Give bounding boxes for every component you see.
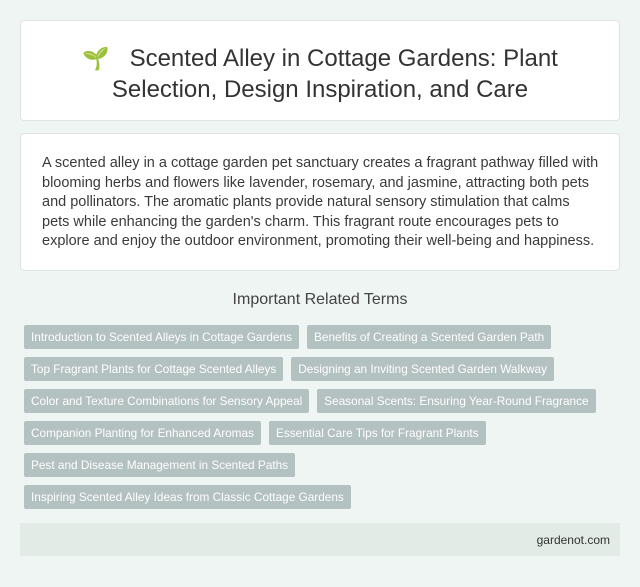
section heading: Important Related Terms: [233, 291, 407, 308]
tag: [291, 357, 554, 381]
title: Selection, Design Inspiration, and Care: [112, 76, 528, 103]
description card: [20, 133, 620, 271]
tag: Pest and Disease Management in Scented Paths: [31, 458, 288, 472]
header card: [20, 20, 620, 121]
tag: Companion Planting for Enhanced Aromas: [31, 426, 254, 440]
tag: [24, 485, 351, 509]
title: [82, 45, 558, 103]
tag: Essential Care Tips for Fragrant Plants: [276, 426, 479, 440]
tag: [24, 453, 295, 477]
tag: [317, 389, 596, 413]
tag: [269, 421, 486, 445]
tag: [24, 389, 309, 413]
tag: [24, 325, 299, 349]
tag: Seasonal Scents: Ensuring Year-Round Fragrance: [324, 394, 589, 408]
footer: [20, 523, 620, 556]
footer: gardenot.com: [537, 533, 610, 547]
tag: [24, 421, 261, 445]
tag: Introduction to Scented Alleys in Cottage Gardens: [31, 330, 292, 344]
tag: Benefits of Creating a Scented Garden Path: [314, 330, 544, 344]
tag: Top Fragrant Plants for Cottage Scented Alleys: [31, 362, 276, 376]
description text: A scented alley in a cottage garden pet sanctuary creates a fragrant pathway filled with blooming herbs and flowers like lavender, rosemary, and jasmine, attracting both pets and pollinators. The aromatic plants provide natural sensory stimulation that calms pets while enhancing the garden's charm. This fragrant route encourages pets to explore and enjoy the outdoor environment, promoting their well-being and happiness.: [42, 155, 598, 249]
tag: [24, 357, 283, 381]
tag: Designing an Inviting Scented Garden Walkway: [298, 362, 547, 376]
tags: [24, 325, 596, 509]
tag: Color and Texture Combinations for Sensory Appeal: [31, 394, 302, 408]
title: 🌱 Scented Alley in Cottage Gardens: Plant: [82, 45, 558, 72]
tag: Inspiring Scented Alley Ideas from Classic Cottage Gardens: [31, 490, 344, 504]
tag: [307, 325, 551, 349]
